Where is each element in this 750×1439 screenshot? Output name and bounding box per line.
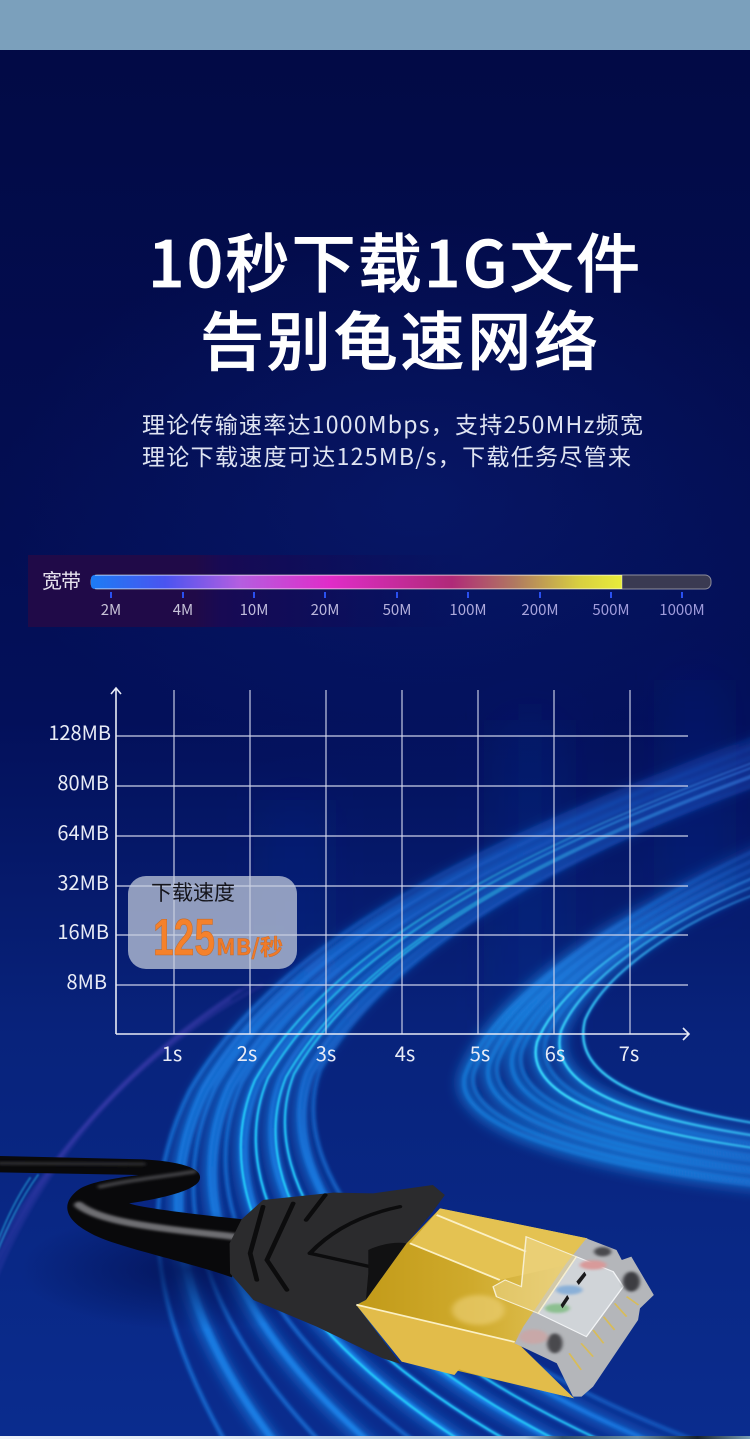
callout unit: MB/秒 (216, 930, 283, 962)
shield lower face (356, 1305, 574, 1398)
x-axis labels: 1s (162, 1038, 182, 1067)
plug window (538, 1257, 623, 1337)
chart axes with arrows (111, 688, 689, 1040)
y-axis labels: 16MB (57, 916, 109, 945)
bandwidth bar panel (28, 555, 711, 627)
plug slots (561, 1272, 586, 1308)
bottom edge strip (0, 1436, 750, 1439)
bar scale labels: 20M (311, 599, 339, 620)
gold shield (356, 1208, 587, 1398)
x-axis labels (162, 1038, 639, 1067)
cable shadow (20, 1210, 360, 1330)
callout box (128, 876, 297, 969)
shield light patch (452, 1295, 505, 1325)
shield bright edges (356, 1215, 526, 1342)
plug latch (493, 1237, 576, 1313)
subtitle: 理论下载速度可达125MB/s，下载任务尽管来 (142, 438, 631, 472)
title (148, 214, 640, 384)
bar track (91, 575, 711, 589)
cable highlights (0, 1163, 234, 1237)
secondary streak lines (464, 827, 750, 1190)
secondary streak glow (464, 830, 750, 1190)
purple left streaks (0, 985, 262, 1280)
secondary streak bright core (536, 860, 750, 1154)
y-axis labels (48, 717, 111, 995)
x-axis labels: 3s (316, 1038, 336, 1067)
boot front shade (366, 1243, 407, 1300)
bar scale labels (101, 599, 705, 620)
main streak bright core (241, 745, 750, 1439)
bar scale labels: 4M (173, 599, 193, 620)
bar scale labels: 10M (240, 599, 268, 620)
x-axis labels: 5s (470, 1038, 490, 1067)
clear plug head (515, 1238, 654, 1397)
callout value: 125 (153, 909, 215, 967)
ethernet cable connector (0, 1156, 654, 1398)
y-axis labels: 128MB (48, 717, 111, 746)
y-axis labels: 32MB (57, 867, 109, 896)
bar scale labels: 200M (521, 599, 559, 620)
y-axis labels: 64MB (57, 817, 109, 846)
grid lines (116, 690, 688, 1034)
bar fill (91, 575, 622, 589)
x-axis labels: 7s (619, 1038, 639, 1067)
title: 10秒下载1G文件 (148, 214, 640, 306)
connector boot (230, 1185, 445, 1364)
title: 告别龟速网络 (200, 292, 598, 384)
speed chart (48, 688, 689, 1067)
bar sheen (95, 576, 622, 588)
bar scale labels: 50M (383, 599, 411, 620)
callout label: 下载速度 (151, 877, 235, 907)
subtitle: 理论传输速率达1000Mbps，支持250MHz频宽 (142, 406, 643, 440)
bar scale labels: 2M (101, 599, 121, 620)
background glow (0, 220, 750, 780)
plug contacts (569, 1297, 639, 1370)
bar scale labels: 100M (449, 599, 487, 620)
callout: download speed (128, 876, 297, 969)
bar label: 宽带 (42, 565, 81, 594)
top band (0, 0, 750, 50)
x-axis labels: 4s (395, 1038, 415, 1067)
cyan far-left streaks (0, 1175, 38, 1255)
faint vertical light bands (270, 680, 720, 1020)
bar scale labels: 1000M (659, 599, 705, 620)
bar scale labels: 500M (592, 599, 630, 620)
shield top face (410, 1208, 587, 1280)
main streak lines (158, 720, 750, 1439)
y-axis labels: 8MB (67, 966, 107, 995)
boot ridges (250, 1195, 400, 1290)
bar ticks (110, 592, 683, 598)
shield body (356, 1208, 587, 1398)
cable (0, 1156, 244, 1277)
light streak background (0, 720, 750, 1439)
panel backdrop (28, 555, 468, 627)
x-axis labels: 2s (237, 1038, 257, 1067)
main streak glow (176, 725, 750, 1439)
subtitle (142, 406, 643, 472)
y-axis labels: 80MB (57, 767, 109, 796)
x-axis labels: 6s (545, 1038, 565, 1067)
plug wire colours (519, 1247, 640, 1353)
